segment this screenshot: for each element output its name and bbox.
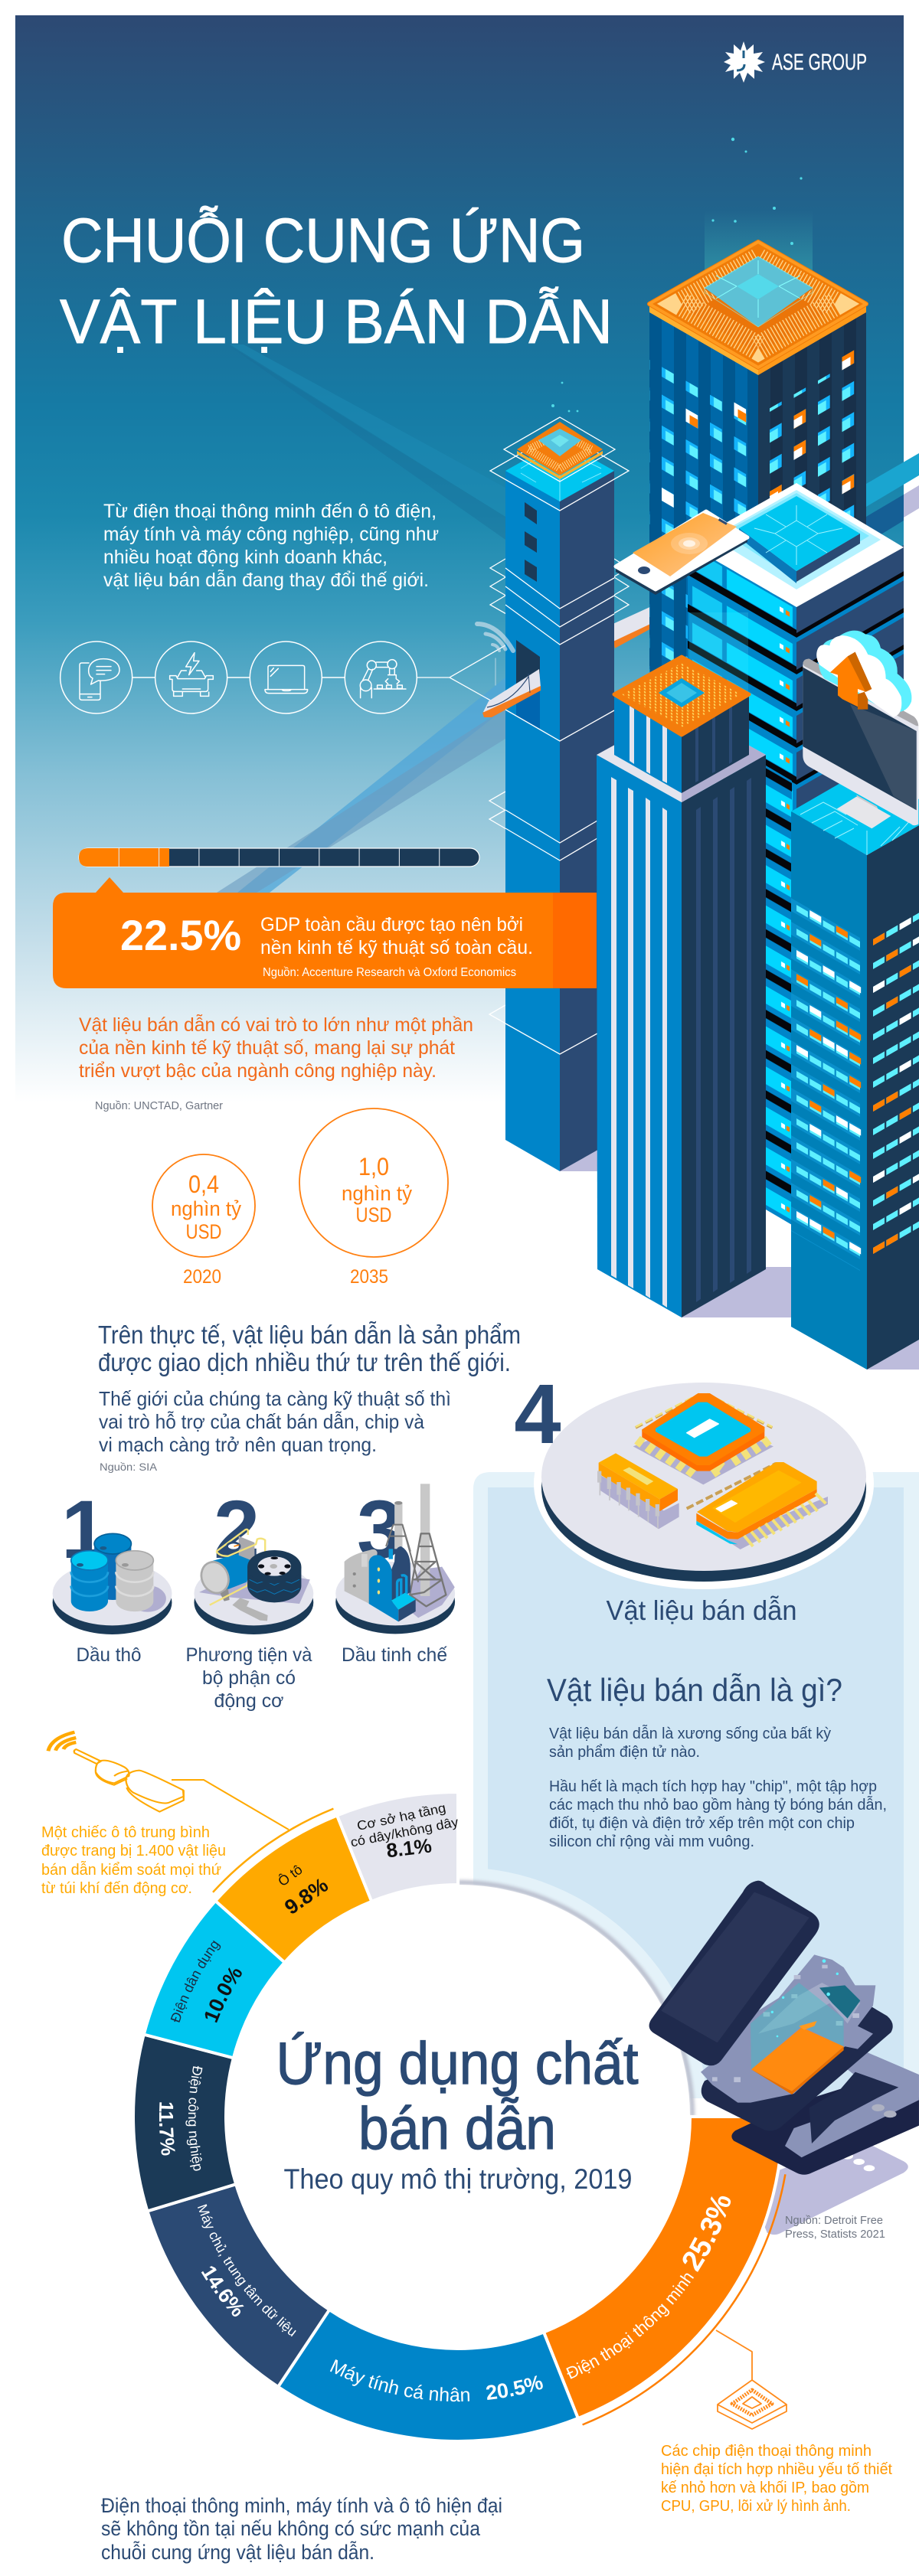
traded product heading: được giao dịch nhiều thứ tư trên thế giới. xyxy=(98,1348,511,1376)
icon: car key xyxy=(48,1732,184,1812)
monitor with cloud xyxy=(803,631,918,828)
segment: wired and wireless infrastructure: Cơ sở hạ tầng xyxy=(355,1801,447,1833)
orange paragraph xyxy=(79,1014,473,1082)
upload arrow xyxy=(830,652,872,710)
rank 1: crude oil: 1 xyxy=(61,1483,107,1575)
logo wordmark: ASE GROUP xyxy=(772,50,867,75)
supporting paragraph: Thế giới của chúng ta càng kỹ thuật số thì xyxy=(99,1387,451,1410)
intro paragraph xyxy=(103,501,439,591)
orange paragraph: Vật liệu bán dẫn có vai trò to lớn như một phần xyxy=(79,1014,473,1036)
segment: wired and wireless infrastructure: có dây/không dây xyxy=(349,1814,460,1850)
donut centre title: bán dẫn xyxy=(358,2094,556,2162)
narrow server column xyxy=(766,766,792,1225)
segment: industrial electronics: Điện công nghiệp xyxy=(185,2065,202,2171)
square chip xyxy=(633,1393,773,1484)
circle: 2020 market size: 2020 xyxy=(183,1266,221,1288)
what is paragraph: Vật liệu bán dẫn là xương sống của bất kỳ xyxy=(549,1725,831,1742)
what is paragraph: các mạch thu nhỏ bao gồm hàng tỷ bóng bán dẫn, xyxy=(549,1796,887,1814)
rank 4: semiconductor disk: 4 xyxy=(514,1367,561,1461)
supporting paragraph: vai trò hỗ trợ của chất bán dẫn, chip và xyxy=(99,1410,424,1433)
highlighted windows right xyxy=(770,350,854,536)
exploded smartphone xyxy=(649,1881,919,2175)
intro paragraph: máy tính và máy công nghiệp, cũng như xyxy=(103,524,439,545)
source: Detroit Free Press: Nguồn: Detroit Free xyxy=(785,2214,883,2227)
ground shadows xyxy=(560,1144,919,1370)
traded product heading xyxy=(98,1321,521,1376)
main title xyxy=(60,206,613,357)
stat description: GDP toàn cầu được tạo nên bởi xyxy=(260,914,523,935)
icon: electric car xyxy=(155,642,227,713)
donut centre title: Ứng dụng chất xyxy=(276,2029,639,2097)
what is heading: Vật liệu bán dẫn là gì? xyxy=(547,1672,842,1708)
derrick lattices xyxy=(410,1533,446,1606)
mainboard frame xyxy=(701,1954,893,2131)
car callout text: bán dẫn kiểm soát mọi thứ xyxy=(41,1861,221,1879)
chip on tall tower xyxy=(649,211,866,375)
main title: CHUỖI CUNG ỨNG xyxy=(61,206,585,276)
circle: 2035 market size: nghìn tỷ xyxy=(342,1182,412,1205)
mobile phone floating xyxy=(616,511,747,595)
closing paragraph xyxy=(101,2494,502,2564)
segment: automotive: Ô tô xyxy=(275,1861,306,1889)
upper block xyxy=(614,697,682,793)
what is paragraph: Hầu hết là mạch tích hợp hay "chip", một tập hợp xyxy=(549,1778,877,1795)
segment: automotive: 9.8% xyxy=(280,1873,332,1919)
blue plant xyxy=(378,1546,410,1605)
traded product heading: Trên thực tế, vật liệu bán dẫn là sản phẩm xyxy=(98,1321,521,1349)
segment: servers and data centres: 14.6% xyxy=(201,2266,244,2316)
coloured windows left face xyxy=(796,903,861,1255)
segment: wired and wireless infrastructure: 8.1% xyxy=(385,1833,433,1862)
closing paragraph: sẽ không tồn tại nếu không có sức mạnh của xyxy=(101,2517,481,2540)
segment: servers and data centres: Máy chủ, trung tâm dữ liệu xyxy=(198,2204,296,2336)
smartphone chip callout: CPU, GPU, lõi xử lý hình ảnh. xyxy=(661,2498,851,2515)
wire frames in front of left tower xyxy=(490,417,629,1054)
icon: robot arm xyxy=(345,642,417,713)
circle: 2020 market size: nghìn tỷ xyxy=(171,1197,241,1220)
donut centre title xyxy=(276,2029,639,2195)
segment: consumer electronics xyxy=(146,1903,283,2059)
soic chip xyxy=(687,1462,828,1549)
smartphone chip callout: kế nhỏ hơn và khối IP, bao gồm xyxy=(661,2480,869,2496)
dip chip xyxy=(599,1453,679,1529)
stat description: nền kinh tế kỹ thuật số toàn cầu. xyxy=(260,937,533,958)
segment: industrial electronics xyxy=(135,2036,235,2212)
what is paragraph: silicon chỉ rộng vài mm vuông. xyxy=(549,1833,754,1850)
train rear section xyxy=(612,607,649,648)
car callout text xyxy=(41,1824,226,1897)
callout pointer xyxy=(96,877,123,893)
rank 3: refined oil: 3 xyxy=(357,1483,403,1575)
dotted cpu chip xyxy=(614,657,749,735)
engine xyxy=(210,1552,254,1592)
rank 2 label xyxy=(185,1644,312,1712)
sparkle particles xyxy=(551,138,803,412)
car callout text: từ túi khí đến động cơ. xyxy=(41,1880,192,1897)
circle: 2020 market size: 0,4 xyxy=(188,1170,219,1198)
rank 2 label: động cơ xyxy=(214,1690,283,1712)
rank 2 label: Phương tiện và xyxy=(185,1644,312,1666)
orange statistic box xyxy=(53,877,597,988)
cloud xyxy=(816,631,911,717)
stat description xyxy=(260,914,533,979)
progress bar xyxy=(79,848,479,867)
segment: personal computers: Máy tính cá nhân 20.5% xyxy=(329,2359,543,2402)
monitor screen xyxy=(803,668,917,810)
circle: 2035 market size: USD xyxy=(355,1203,392,1226)
intro paragraph: vật liệu bán dẫn đang thay đổi thế giới. xyxy=(103,569,429,591)
stat value: 22.5% xyxy=(120,911,241,959)
back plate xyxy=(731,2052,919,2175)
callout connector xyxy=(172,1780,289,1830)
phone glow xyxy=(671,533,708,554)
main title: VẬT LIỆU BÁN DẪN xyxy=(60,287,613,357)
segment: smartphones: Điện thoại thông minh 25.3% xyxy=(566,2196,731,2379)
source: Detroit Free Press xyxy=(785,2214,885,2241)
smartphone chip callout: hiện đại tích hợp nhiều yếu tố thiết xyxy=(661,2461,892,2478)
donut centre title: Theo quy mô thị trường, 2019 xyxy=(283,2163,633,2195)
orange paragraph: triển vượt bậc của ngành công nghiệp này. xyxy=(79,1060,437,1082)
icon: smartphone with chat xyxy=(61,642,132,713)
closing paragraph: chuỗi cung ứng vật liệu bán dẫn. xyxy=(101,2540,374,2564)
wifi signal xyxy=(477,624,513,685)
circle: 2035 market size xyxy=(299,1108,448,1288)
circuit rooftop xyxy=(791,769,919,855)
closing paragraph: Điện thoại thông minh, máy tính và ô tô hiện đại xyxy=(101,2494,502,2517)
rank 4: semiconductor disk xyxy=(514,1367,874,1589)
rank 3 label: Dầu tinh chế xyxy=(342,1644,447,1666)
train xyxy=(482,669,541,717)
stat description: Nguồn: Accenture Research và Oxford Economics xyxy=(263,966,516,979)
screen xyxy=(649,1881,819,2065)
source: Detroit Free Press: Press, Statists 2021 xyxy=(785,2228,885,2241)
tyre xyxy=(247,1567,301,1602)
chimneys xyxy=(394,1503,402,1549)
rank 1 label: Dầu thô xyxy=(77,1644,141,1666)
coloured windows right face xyxy=(873,909,919,1254)
supporting paragraph xyxy=(99,1387,451,1456)
icon: chip with connector xyxy=(716,2330,787,2429)
segment: automotive xyxy=(215,1816,371,1963)
segment: servers and data centres xyxy=(149,2186,329,2387)
icon row xyxy=(61,642,417,713)
circle: 2020 market size xyxy=(152,1154,255,1288)
car callout text: được trang bị 1.400 vật liệu xyxy=(41,1843,226,1859)
segment: consumer electronics: Điện dân dụng xyxy=(170,1940,221,2023)
circle: 2020 market size: USD xyxy=(185,1220,222,1243)
source: SIA: Nguồn: SIA xyxy=(100,1461,158,1473)
battery xyxy=(751,1983,844,2094)
diagonal light bands xyxy=(217,344,919,893)
rank 3: refined oil xyxy=(335,1483,455,1666)
supporting paragraph: vi mạch càng trở nên quan trọng. xyxy=(99,1433,377,1456)
rank 2: vehicles and parts: 2 xyxy=(214,1483,260,1575)
intro paragraph: nhiều hoạt động kinh doanh khác, xyxy=(103,547,388,568)
panel: what are semiconductors xyxy=(473,1472,919,2098)
orange paragraph: của nền kinh tế kỹ thuật số, mang lại sự phát xyxy=(79,1037,455,1059)
segment: industrial electronics: 11.7% xyxy=(159,2102,175,2156)
intro paragraph: Từ điện thoại thông minh đến ô tô điện, xyxy=(103,501,437,522)
banner background xyxy=(15,15,904,1102)
wire frames behind left tower xyxy=(417,559,629,1054)
tower windows xyxy=(516,502,540,693)
rank 2: vehicles and parts xyxy=(185,1483,313,1712)
grey tank xyxy=(345,1549,378,1604)
tall chip tower xyxy=(649,303,866,773)
left tower xyxy=(505,440,614,1171)
monitor frame xyxy=(803,659,918,825)
monitor stand xyxy=(856,795,881,815)
rank 1: crude oil xyxy=(53,1483,172,1666)
segment: personal computers xyxy=(280,2312,579,2440)
car callout text: Một chiếc ô tô trung bình xyxy=(41,1824,210,1841)
rank 2 label: bộ phận có xyxy=(202,1667,296,1689)
circle: 2035 market size: 2035 xyxy=(350,1266,388,1288)
panel heading: Vật liệu bán dẫn xyxy=(607,1595,796,1626)
segment: wired and wireless infrastructure xyxy=(337,1792,460,1902)
segment: smartphones xyxy=(545,2115,780,2416)
phone home button xyxy=(638,566,650,574)
chip on left tower xyxy=(517,422,603,479)
right tower xyxy=(791,769,919,1370)
segment: consumer electronics: 10.0% xyxy=(205,1967,242,2023)
what is paragraph: điốt, tụ điện và điện trở xếp trên một con chip xyxy=(549,1815,855,1832)
smartphone chip callout xyxy=(661,2443,892,2515)
circle: 2035 market size: 1,0 xyxy=(358,1153,389,1180)
donut chart xyxy=(135,1794,780,2440)
server stack xyxy=(688,483,904,873)
what is paragraph: sản phẩm điện tử nào. xyxy=(549,1744,700,1761)
accent arcs xyxy=(213,1809,785,2424)
logo xyxy=(724,41,867,83)
wrench xyxy=(232,1598,268,1621)
donut background circle xyxy=(460,1869,705,2115)
highlighted windows left xyxy=(662,361,746,550)
logo mark xyxy=(724,41,765,83)
source: UNCTAD: Nguồn: UNCTAD, Gartner xyxy=(95,1099,223,1112)
phone shadow xyxy=(764,2140,908,2235)
icon: laptop xyxy=(250,642,322,713)
what is paragraph xyxy=(549,1725,887,1850)
smartphone chip callout: Các chip điện thoại thông minh xyxy=(661,2443,872,2460)
front tower with chip xyxy=(597,657,766,1317)
